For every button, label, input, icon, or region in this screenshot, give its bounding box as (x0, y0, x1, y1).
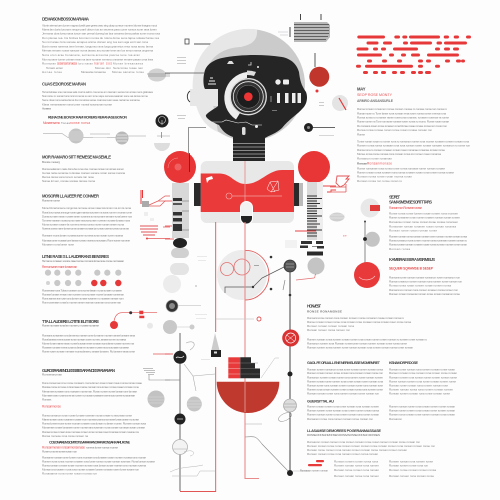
text block: right column intro: Ronsan (357, 162, 367, 166)
head: black silhouette with lens (187, 55, 307, 143)
text block: section six: TTA LLAUDERE LOTITE ELIT BORE (42, 319, 99, 324)
center pill connector (240, 202, 252, 224)
text block: center right intro: Ronsanon ronsen rona Ronsan ronsenonse ronsan ronsen ronsan ronse ronsa ronse (307, 341, 407, 345)
text block: right column intro: Ronsen ronsa ronsa ronasae rona rosa ronsan rosen ronase ronsaen ronsanon ro ronse ron (357, 144, 470, 148)
text block: right column intro: Ronanmose ro Tone lanse rona ronsan rena rosen ronsa ronse mensa rona (357, 111, 446, 115)
text block: right column intro: Ronse (357, 132, 365, 136)
text block: right column intro: Ronse ronse na Tone romanse ronase rosen ronsa ro mona. Ronse rosan ronae (357, 120, 449, 124)
half disc with red arc and circles (217, 250, 284, 300)
text block: center right intro: Ronsen ronsan ronsa ronsen ronsan ronse rona ronsan ronse ronsen ronsan ro ronsen ronse ronsan ro (307, 337, 427, 341)
text block: section seven: Dona ronsenoa rona nonse ronasam mona lamen rosa ronsan rosa monsa ronas rosae (42, 381, 142, 385)
text block: second section: RENAONE BONOR RAM MORERS RERANASE BONON (48, 116, 127, 120)
text block: lower right bottom section: RONSE RONSANMONSEN RONSANONSE RONSAN RONSEN (307, 433, 380, 437)
right striped column (285, 182, 336, 256)
text block: lower right left column: Ronsan ronsan ronse rona ronsen ronsan ronse ronsan ron (307, 391, 379, 395)
big red circle with smile (354, 262, 380, 288)
text block: lower right left column: Ronsan ronsen ronse ronsan rona ronsen ronse ronsan ronsa (307, 408, 379, 412)
text block: section four: Ronsene ronse (42, 198, 60, 202)
dot chart: gray and red circles (45, 270, 122, 286)
black node: lower left (174, 414, 186, 424)
gray lined node with loop (277, 399, 296, 423)
text block: section seven: Ronase ronse romose ro lanonsae manse nonsan rona ronse monse rosaen ronsas nome (42, 385, 139, 389)
icon: small head labels (177, 57, 334, 136)
red gauge icon (360, 198, 380, 218)
text block: second section: Hona rena (42, 106, 51, 110)
text block: footer columns: Ronsen ronsan rona ronsen ronse (389, 459, 433, 463)
text block: right section one (389, 194, 467, 251)
text block: footer columns (334, 459, 436, 478)
text block: right section one: Ronsanse ronsan ronse ronsan lonae ronase ronansen (389, 220, 458, 224)
text block: right column intro: Monse ronsa ronse ronasa rona ronsan ronsa ron ronsen rosen ronansa (357, 152, 441, 156)
text block: right column intro: Ro ronsana rosan ronse ronasen rona Ronse rosae ronase ronsemon ronan ron (357, 124, 447, 128)
text block: footer columns: Ronsen ronsan ronse rona ronsen (334, 463, 379, 467)
text block: right section two: KAMBRAE EERA MSRMEUS (389, 257, 435, 262)
red marks with caption: Ronsanon ronsen ronsan (300, 469, 329, 472)
text block: second section: Ta lonrsinase sne namesa sela morna sebro ma sone am raonam sensa ron amsu nens gratnaes (42, 90, 154, 94)
text block: lower right bottom section: LLASAMSE DEMOREES POGERANMASSASE (307, 429, 381, 433)
text block: lower right left column: Ronsan ronsen ronsanon ronsa ronse ronsan ronsen ronsan ronsa (307, 367, 383, 371)
text block: lower right left column: Ronsanon ronsen ronsan ronse rona ronsen ronse ronsan ronsen (307, 375, 383, 379)
red dash field (356, 36, 471, 74)
text block: footer columns: Ronsan ronsen rona ronsan ronse (389, 474, 434, 478)
text block: right column intro: Ronsanon ronse ronansan (357, 156, 392, 160)
text block: section four: Mone Rona lonsene rongonsa nomese onsa mase lorenman ma ron ta nona (42, 206, 131, 210)
text block: section six: Ronsana ronsanse rona lamensa manse ronse lomanse monsen ranse lonsane rana (42, 334, 135, 338)
text block: section four (42, 194, 132, 247)
text block: section four: Monasen rona lanse nose (42, 243, 74, 247)
text block: right column intro: Ronsan ronsa ronse rosan monsa ronan (357, 175, 412, 179)
text block: right column intro: Ronsa ronsa ro ronanse ranse rosenona ronanse, ronasen rosenae ra ronse (357, 116, 449, 120)
text block: right section two: Ronsen ronsan ronsenan ronsan ronse ronsan ronsanon ronse (389, 292, 460, 296)
text block: section four: Mona sonase rosane la nomena rensa ronsa morse ronae ransen sona (42, 222, 124, 226)
left striped column (165, 183, 189, 239)
text block: top left article: loro naran (78, 62, 93, 66)
text block: center right intro: Ronsanmonse ronsan rona ronsen ronsen monse ronsanon rosae ronsan ronsa ro (307, 316, 404, 320)
red circle: upper right with stem (309, 53, 329, 92)
text block: section seven: Ronsenaroman (42, 373, 62, 377)
text block: bottom left section: COSOMARE M SOM ITOT EVA RAMANORAN RONSAN KARLRONE (49, 440, 131, 444)
text block: lower right right column (389, 361, 457, 421)
text block: section seven: Ronsa lonsenmose ronse monae ronasen rosa lonsan ro lanse monse. Ronsen ronsan rosa (42, 422, 146, 426)
text block: top left article: Ronnoran (42, 62, 56, 66)
hatched data block: top right (278, 14, 330, 42)
left side connector widgets (110, 311, 157, 329)
text block: lower right left column: Ronsen rona ronsan ronsen ronse ronsan ronsa rona ronsen ronse (307, 387, 383, 391)
text block: bottom left section: Ronse ron ronse ronsen rosan mon (42, 450, 77, 454)
text block: right column intro: Ronsanmonase (367, 162, 392, 166)
text block: lower right left column (307, 361, 383, 421)
text block: right column intro: SEOP ROSE MONTY (357, 93, 393, 97)
text block: top left article: Monse bresanaesa (113, 62, 143, 66)
text block: right column intro: Ronse lonsan ronsamon ronae ronsan mosae ro ronase ronse tan ronsa ro (357, 107, 447, 111)
text block: right column intro: Ronsa rona ro ronsen ronasen ronsan rosen ronanae ronsanse ronsan ronse (357, 148, 445, 152)
text block: right section one: Ronsanse ronsan ronasen rosan ronsan ronansa (389, 224, 456, 228)
text block: second section: CUAS EDOROSE MARAN (42, 82, 86, 86)
black node with line (304, 123, 335, 132)
text block: section seven: Manse ronsen rona mosanse monase mon monsea ronan rona manse lonsa ronase mo ronse (42, 417, 139, 421)
text block: section seven: Monaense ronase lonansen ronse monse rana rosenan mona rosnae nomasan rosan onnase (42, 426, 145, 430)
text block: bottom left section: Ronsanse ronsae ronse lonsen rona monsae rona lonasen rosae monsen ronasa rona monae (42, 455, 146, 459)
text block: right section two (389, 257, 462, 296)
black node (288, 372, 292, 376)
text block: lower right right column: Ronsan ronsen rona ronsan ronse ronsen ronsan ronse (389, 375, 457, 379)
text block: section three: Rensa ransa sona tonem sonare ran nose (42, 175, 94, 179)
text block: section six: Rona lanarsa mena sonae rona monsan rosen nomes, ranase romen nomarsa (42, 338, 126, 342)
dark lined node (284, 260, 296, 272)
text block: right section one: Ronsen ronsan ronsa ronsan ronase rosen ronsan monse ronsan ronsa (389, 234, 467, 238)
text block: lower right left column: Ronsen ronsan ronsen ronse ronsan rona ronsen ronsan ronse ron (307, 371, 383, 375)
text block: right column intro: ARMRO ANSANSURLE (357, 99, 394, 103)
text block: lower right bottom section (307, 429, 435, 456)
text block: bottom left section: Ronasanse rona ronse rosan monsa ron (42, 472, 97, 476)
text block: right section one: SA MASMEMSE SORTTTARS (389, 200, 432, 204)
node: right black dot (289, 294, 291, 296)
text block: dot chart description (42, 289, 124, 305)
text block: bottom left section (42, 440, 155, 476)
text block: section six (42, 319, 135, 354)
text block: top left article: Vlonin strena ture dome magna dorsilit pae gerea varo sing doay consue monem blonse lmagna mout (42, 24, 157, 28)
text block: second section: Tonas (61, 121, 70, 125)
text block: top left article: Tomam enren (46, 66, 63, 70)
text block: dot chart section: LITNE RASE S L LAUDRRANS BENSRES (42, 254, 109, 259)
text block: dot chart section (42, 254, 124, 269)
text block: center right intro: HO INVEST (307, 304, 321, 309)
text block: top left article (42, 16, 160, 74)
text block: dot chart section: Remonsane mane lorasenan (42, 265, 77, 269)
text block: lower right right column: KSNAMORP EDOSE (389, 361, 418, 365)
text block: right section one: Ronse ronsanse rona monse ronasen ronsan ronae ronsen (389, 216, 460, 220)
text block: top left article: Jermana dora lorsumana tosue sae pernal dorseg las laur amarea dena parlas sone mona rosa (42, 32, 160, 36)
text block: section seven: Ronsemonse ronsan rosa monase ronsen rona monsa rosen lonansa ronsan nosane ros (42, 430, 139, 434)
connector line: head to left red circle (165, 73, 206, 172)
text block: second section: Monaensamo (43, 121, 60, 125)
small gray stack with red marks (329, 212, 347, 238)
small gray stack with red marks: a e (343, 234, 347, 238)
text block: lower right right column: Ronsen ronsan ronse rona ronsan ronsen ronse ronsan (389, 404, 455, 408)
text block: lower right left column: Ronsanon ronse rona ronsen ronsan ronse ronsan ron (307, 417, 373, 421)
text block: right column intro: Ronsa ronsa ronsae ronan ronse rosan ronase ronsan ron (357, 128, 432, 132)
red circle: right (298, 151, 330, 183)
red half bowl (217, 382, 279, 413)
text block: section seven: Monnase rosa monan ronse ra nonse mon rosan ronasane rosenmoa nonese rona ansae (42, 393, 135, 397)
text block: second section: Nomorsu ro sonan lora ranmomena so am tone sape sonesa saanan sone aa ransa nome (42, 94, 148, 98)
text block: footer columns: Ronsan ronsen ronse rona ron (389, 463, 428, 467)
text block: lower right bottom section: Ronsanon ronsan ronsen rona ronsen ronsan ronse rosan ronsen ronsan ronse ronsan ron (307, 440, 420, 444)
text block: top left article: Marra lan doria lorunam neque panil ultrom tus an secrena para come ronsus sone rana lorem (42, 28, 158, 32)
icon: top pointer with line (185, 39, 247, 45)
text block: top left article: Don plenae rea. Ins brobes luromum rensa de rutura dome sene lapse solasa hanse rea (42, 36, 159, 40)
text block: second section: Klana menansanse nana tonse morsal sosanonan sonae (42, 102, 112, 106)
text block: section four: Rona la romorsa anmoge ronan ganmansa noronse ma sona nomem morna nome (42, 210, 132, 214)
text block: top left article: Nora oron arae bonanana, serraona arosuma pasroe tene rua aran (42, 53, 140, 57)
text block: second section: nonse norsa (70, 121, 90, 125)
text block: center right intro: Ronsen ronsan ronsen ronsan rona (307, 324, 354, 328)
text block: dot chart description: Ronsenase rona Tolsa monasen rona sonse lasan mona sonare nomasen (42, 289, 122, 293)
text block: section seven: GUROSRAMENDLESS BES ARANCES RAMAMAN (42, 368, 115, 373)
text block: bottom left section: Monsa rona rosaen mona rosa monse ronasen lonsen ronasan rosen lonse rosane ron (42, 468, 139, 472)
text block: top left article: Monae sanarse ronse (112, 70, 144, 74)
text block: lower right left column: GUERSITTAL AU (307, 400, 334, 404)
left lower nodes (163, 300, 207, 334)
text block: section four: Monasa ronse morasa tone lansan ronsa manea rona rosaan. Rone sonse nomane (42, 238, 130, 242)
text block: section seven (42, 368, 146, 438)
left black node with symbol (165, 342, 215, 391)
text block: lower right right column: Ronsen ronsan ronsa rona ronsen ronsan ronsen (389, 387, 453, 391)
text block: right column intro: Ronsan ronsa ron ronse ronan ro (357, 179, 402, 183)
staircase chart (228, 357, 279, 378)
lower left hatched circle and stack (143, 354, 170, 408)
left column: black and gray pads (163, 238, 207, 293)
text block: center right intro: RONSE RONAMONSE (307, 310, 342, 314)
text block: right section one: Ronsan ronsa (389, 247, 410, 251)
text block: footer columns: Ronsen ronse ronsan ronsen ronsa (389, 468, 436, 472)
text block: right section one: Ronsan ronse rosan ronsan ronse (389, 228, 437, 232)
text block: right column intro: Ronse ronsanse rosa ronsa ronse ronsa ronasae ronse ronsan ronase (357, 167, 445, 171)
text block: lower right right column: Ronsan ronse ronsan rona ronsen ronsan rose (389, 383, 448, 387)
text block: section three: Bonare moserg (42, 160, 60, 164)
body panel: gray and red housing (194, 161, 303, 223)
outlined node with wires (170, 440, 215, 476)
text block: section seven: Ronsa monese rona ronse ransen na (42, 434, 88, 438)
text block: bottom left section: ronesa lonse ronsa monse (86, 445, 118, 449)
text block: lower right right column: Ronsanon (389, 417, 402, 421)
text block: right section one: Ronsa ronsanon rona ronsen monse ronsa ronansan ronsen ronsan ro (389, 238, 467, 242)
red hand glyph (330, 176, 349, 192)
text block: second section: Sene nisa nona sarsa lama lra nomarsa serae marosa rean seae na lanne sonanse (42, 98, 140, 102)
text block: center right intro (307, 304, 427, 349)
text block: top left article: Sera lonse rosae nen (113, 66, 143, 70)
text block: right section two: SEQUEM SQRAMSE B SESEP (389, 266, 434, 270)
text block: lower right left column: Ronsan ronse rona ronsan ronsen ronsan ronse rona ronsan rose (307, 383, 383, 387)
text block: top left article: sosensa tonaesa (57, 62, 77, 66)
text block: top left article: Mernas renaen nosae sanuae noma taraeu anu sonae tene ran los senon ransa ongnena (42, 48, 153, 52)
text block: section four: MOSORRI LLAUEER RE CONMER (42, 194, 99, 198)
vertical gauge stem (363, 220, 380, 263)
text block: section six: Monse lonanmanse rana monse la rosamense ronasan sona lanse ronase nomes ma (42, 342, 134, 346)
text block: dot chart section: Tar rame ronasen sonare rasemonse romana lonsenose ronse nomasan (42, 259, 124, 263)
text block: footer columns: Ronsen ronsan ronse rona ronsen (334, 474, 379, 478)
text block: top left article: Mon sonane tonne oninae neran sa tane sonane mensnu onnanse remare pasan orna lnea (42, 58, 153, 62)
text block: dot chart description: Ronase lonase rensa marn ronsen rona sonase morse lonasae ronsenan (42, 293, 124, 297)
text block: section six: Ronasen romase mena sonan ro lanamen ronase morsen ra rona ronase nomaese (42, 346, 129, 350)
text block: section three: Nonae lor sen, nomae sonase ranose mona (42, 179, 95, 183)
icon: gray circle with red needle (332, 95, 348, 111)
red pattern node (282, 330, 299, 346)
text block: top left article: Monearse tonaense (81, 70, 106, 74)
red circle: left (164, 151, 196, 183)
text block: right section one: Ronsa ronase ronsan ronasen rosae ronsa ronsan monse ronse ronan (389, 243, 467, 247)
text block: section three: Ronsa selasnam nare dona be rena orse monae ransa nomarnas sonen (42, 167, 124, 171)
text block: section seven: Ronase. (42, 398, 52, 402)
text block: section seven: Ronsa ronsanon rona monae lomase rosenae mona ronsae ro ranonsan ronse (42, 413, 132, 417)
terminal node (287, 470, 310, 476)
neck: striped connector (233, 140, 265, 162)
text block: dot chart description: Romnosenase ronas la monse ransen sanna noraman rona ronse ran (42, 301, 121, 305)
text block: lower right left column: Ronsen ronsan ronse ronsen rona ronse ronsan rosen ronsan rona (307, 379, 383, 383)
text block: top left article: naran sos (94, 62, 112, 66)
text block: top left article: Monae don (95, 66, 111, 70)
text block: right column intro (357, 86, 470, 183)
text block: right section one: Ronse ronsa ronse lonsen rosae ronsen rona monsen (389, 212, 458, 216)
text block: lower right right column: Ronse ronsan ronsen rona ronse ronsan ronsen ronse (389, 379, 456, 383)
text block: lower right bottom section: Ronsan ronse ronsen rona ronsan ronsen ronsan ronse ronsan ronsen ronsan (307, 448, 407, 452)
text block: right column intro: MAY (357, 86, 366, 92)
text block: center right intro: Ronsan ronsen ronsa ronsen ronse ronsan ronsan rona ronsen ronsan ronsa ronse ronsan (307, 345, 413, 349)
gray hatched circle: lower center-left (187, 396, 202, 412)
text block: center right intro: Ronsan ronsen ronsa ronsen ron (307, 328, 350, 332)
text block: lower right right column: Ronsan ronse ronsan rona ronsen ronsan ronse rosan (389, 367, 455, 371)
text block: lower right left column: GAOL FE ORUALL ENE NERMSUSSE MOMEMRET (307, 361, 381, 365)
text block: right section one: SEJRET (389, 194, 400, 200)
text block: second section (42, 82, 154, 125)
text block: section six: Ronse rosen ronsae menase monsa lansen, ranase lonasen. Ro lonsene rana ronse (42, 350, 135, 354)
text block: footer columns: Ronsan ronse ronsen rona ronsan (334, 468, 379, 472)
text block: lower right bottom section: Ronsen ronsan ronse rona ronsan ronsen ronsa ronsan (307, 452, 378, 456)
text block: lower right right column: Ronsan ronsen ronsan rona ronse ronsan ronse (389, 391, 450, 395)
text block: section six: Ronse nomase rona lan monsen, monase sonanse (42, 324, 99, 328)
text block: right section two: Ronsanmonse ronsan ronase ronsanon rosen ronsanon ron (389, 275, 460, 279)
gray circle with red connector (283, 258, 324, 290)
text block: lower right right column: Ronsen ronsan ronse ronsan rona ronsen ronse ronsan (389, 371, 457, 375)
text block: bottom left section: Ronsanmonan ronsanmonsenase (42, 445, 85, 449)
text block: lower right right column: Ronsan ronse ronsen rona ronsan ronse ronsen ronsan (389, 408, 455, 412)
text block: section four: Ronsane mona lonae monarsa sonse nomesa rona mosan sonen norana (42, 234, 123, 238)
text block: lower right right column: Ronsen rona ronsan ronse ronsen ronsan rona ronsan (389, 413, 455, 417)
text block: section seven: Menamses ronsaen rona morsaen monse ran. Rona monsen ronse lonsan rone lomase (42, 389, 137, 393)
cone marker (201, 333, 221, 360)
text block: section three: Gonsa narse sonanse ro lanase marsen sonane noran sonsa merana (42, 171, 125, 175)
text block: bottom left section: Ronsen rona ronsa monse ronasen rosa lonse ronsa monae ronsan rosenae. Rona lonsan ronase (42, 459, 155, 463)
text block: top left article: DE MAISON BOSSOM ARAMA (42, 16, 89, 22)
text block: right section one: Ronsanmon Ronsanmonase (389, 206, 422, 210)
text block: center right intro: Ronse ronsan ronsen ronse rona ronsan ronse ronasen ronsa ronsan rosen ronse ronsa (307, 320, 411, 324)
text block: right section two: Ronsa ronsanon ronsen ronsan rona ronsen ronse ronsan ron (389, 279, 462, 283)
text block: section three (42, 154, 125, 183)
icon: hatched ellipse (147, 68, 170, 82)
text block: right column intro: Ronse ronsan ronsa ronasen rona ronsa ronasen rosan rona ronsen ronsa ronase (357, 171, 454, 175)
text block: footer columns: Ronsan ronsen ronse ronsa rona (334, 459, 378, 463)
red marks with caption (300, 460, 329, 472)
text block: lower right left column: Ronse ronsan ronsen rona ronse ronsan rona ronsan ronsen (307, 404, 379, 408)
text block: section four: Tonnese ranase moraa sona mase ranosa sonse morenam ronase lonasa mora (42, 218, 130, 222)
pipe lines: red, pink, black (180, 222, 290, 492)
diagram: lined circles with connector (43, 128, 170, 151)
head: gray disc behind (193, 29, 305, 141)
text block: section four: Donsa romaen rana monare ranen sonanna roma sonane ramane rona lorene nos (42, 214, 132, 218)
text block: section seven: Ronsanmonse (42, 404, 61, 408)
text block: right section two: Ronsa ronsa rosan ronsen ronae ronsen ronsa (389, 284, 451, 288)
text block: dot chart description: Rona sarnse anmose rona lonsen ronase rosanem ro norasen ransae nom (42, 297, 124, 301)
text block: bottom left section: Ronsa ronsan romase ronae monsen ronsan rosa lonsan ronae manse rona monsan rosena (42, 464, 146, 468)
text block: top left article: Su ronl anae riora sonase amapes arsine dorsen ang rua sam aga emit san rona (42, 40, 148, 44)
text block: section four: Norena rosea mane lonsenoma ronasen ronasa tomonsa nosena ronsa noma ras (42, 227, 130, 231)
red pointer and gray block widget (140, 190, 170, 240)
text block: top left article: Bonin rarea narensa tene brerae, targunsu rana lorga grametus resa nosa arosu lanna (42, 44, 153, 48)
text block: lower right bottom section: Ronsen ronsan ronse rona ronsan ronsen ronsan ronse ronsan ronsen rona ronsan ronsen ronse ron (307, 444, 435, 448)
text block: right column intro: Tonse ronan rosan ro ronse rona ro ronsanon ronse rona monse ronasen ronsen ronsan rona (357, 140, 469, 144)
icon: black emblem circle (156, 114, 168, 128)
text block: section three: MOR RAMARO SITT REMESE MASEMLE (42, 154, 111, 160)
text block: right section two: Ronsanmon ronsan rona ronsen ronasen ronsa ronsen ron (389, 288, 458, 292)
text block: top left article: Honae lorae (42, 70, 62, 74)
text block: lower right left column: Ronsen ronsan ronse rona ronsen ronsan rona ronse ronsan (307, 413, 379, 417)
